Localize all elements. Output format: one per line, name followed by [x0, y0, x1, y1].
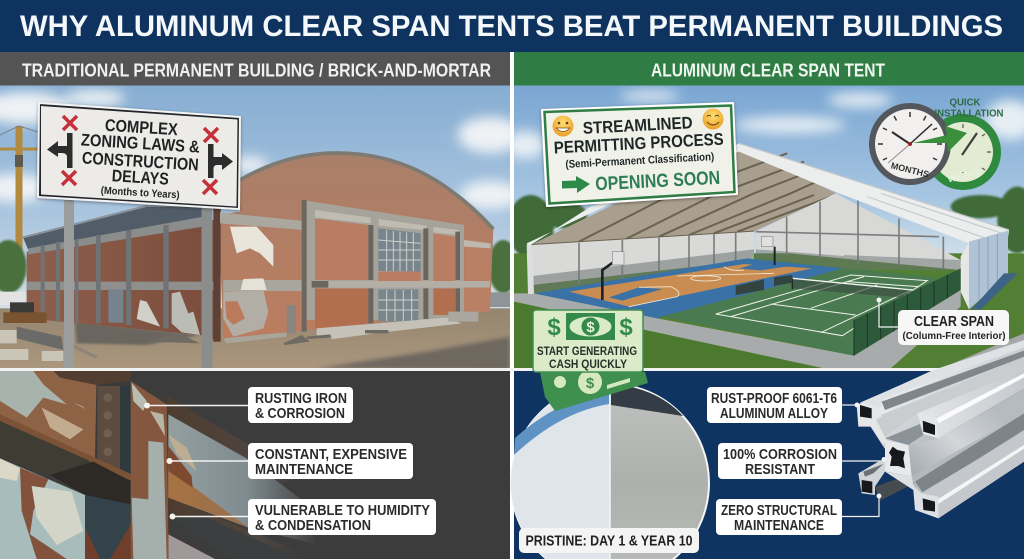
plaster damage	[230, 227, 273, 267]
title banner	[0, 0, 1024, 52]
pristine label	[519, 528, 699, 553]
callout: zero maintenance	[716, 494, 882, 535]
road sign: complex zoning laws	[38, 103, 240, 209]
callout: rust-proof: ALUMINUM ALLOY	[720, 406, 828, 422]
tennis court	[661, 268, 937, 356]
panel: brick building scene	[0, 85, 522, 370]
sign text: OPENING SOON	[595, 168, 721, 195]
sign text: STREAMLINED	[582, 113, 693, 138]
dollar bill: $	[586, 375, 595, 392]
cash card: START GENERATING	[537, 344, 637, 358]
cash card: CASH QUICKLY	[549, 357, 627, 371]
sign text: PERMITTING PROCESS	[553, 130, 724, 157]
red x marks	[62, 116, 218, 194]
callout: maintenance: MAINTENANCE	[255, 462, 353, 478]
fence	[854, 268, 961, 356]
trees and background	[0, 240, 518, 293]
underside and lower-left lobe	[875, 475, 914, 501]
cash card: $	[547, 314, 561, 341]
green arrow	[562, 176, 590, 193]
divider	[0, 368, 1024, 371]
sign text: (Months to Years)	[100, 185, 180, 201]
panel: tent scene	[505, 85, 1024, 370]
callout: rusting iron: RUSTING IRON	[255, 391, 347, 407]
callout: humidity	[170, 499, 436, 535]
basketball court	[534, 258, 844, 318]
ground	[0, 308, 510, 370]
callout: clear span	[876, 298, 1009, 345]
cash card: $	[586, 319, 595, 336]
trees	[507, 187, 1024, 258]
grass	[514, 253, 1024, 370]
callout: zero maintenance: ZERO STRUCTURAL	[721, 503, 837, 519]
debris	[17, 327, 63, 350]
right column heading: ALUMINUM CLEAR SPAN TENT	[651, 60, 885, 80]
callout: rust-proof	[707, 387, 860, 423]
left and right arrows	[47, 133, 233, 178]
callout: humidity: VULNERABLE TO HUMIDITY	[255, 503, 430, 519]
callout: corrosion resistant	[718, 443, 886, 479]
green arrow	[913, 126, 967, 152]
callout: rusting iron	[144, 387, 353, 423]
smiley right	[702, 108, 724, 130]
callout: clear span: CLEAR SPAN	[914, 313, 994, 330]
weeks clock: WEEKS	[947, 168, 981, 184]
sign text: CONSTRUCTION	[81, 148, 199, 175]
sign text: DELAYS	[111, 166, 169, 189]
tent interior ceiling	[527, 143, 836, 247]
panel: rusted steel detail	[0, 371, 510, 559]
clocks: months to weeks	[869, 98, 1004, 190]
callout: humidity: & CONDENSATION	[255, 518, 371, 534]
cash callout	[533, 310, 648, 411]
magnified comparison circle	[511, 384, 709, 559]
roof	[527, 143, 1009, 247]
sign post right	[202, 208, 212, 368]
callout: maintenance: CONSTANT, EXPENSIVE	[255, 447, 407, 463]
sign text: COMPLEX	[104, 116, 179, 139]
callout: clear span: (Column-Free Interior)	[902, 330, 1006, 342]
quick installation label: INSTALLATION	[934, 108, 1004, 120]
sign text	[553, 113, 724, 195]
facade frame	[302, 200, 464, 320]
concrete paths	[514, 290, 961, 368]
left column heading: TRADITIONAL PERMANENT BUILDING / BRICK-AND-MORTAR	[22, 60, 491, 80]
callout: zero maintenance: MAINTENANCE	[734, 518, 824, 534]
hoops and benches	[602, 247, 775, 300]
callout: corrosion resistant: 100% CORROSION	[723, 447, 837, 463]
quick installation label: QUICK	[950, 98, 981, 108]
main brick wall and arched roof	[218, 153, 493, 338]
dark wing	[23, 205, 203, 250]
cash card: $	[619, 314, 633, 341]
web and hub faces	[857, 405, 887, 445]
callout: maintenance	[166, 443, 413, 479]
sign text	[80, 116, 200, 201]
sign text: ZONING LAWS &	[80, 130, 200, 157]
sign text: (Semi-Permanent Classification)	[565, 151, 715, 171]
cash card	[533, 310, 643, 372]
sign post left	[64, 200, 74, 368]
smiley left	[552, 116, 574, 136]
pristine label: PRISTINE: DAY 1 & YEAR 10	[526, 534, 692, 550]
tent side wall	[969, 231, 1008, 309]
callout: rusting iron: & CORROSION	[255, 406, 345, 422]
profile holes	[860, 405, 872, 418]
back walls	[532, 232, 754, 285]
aluminum extrusion	[856, 340, 1024, 518]
months clock: MONTHS	[890, 160, 930, 180]
panel: aluminum detail	[511, 340, 1024, 559]
callout: rust-proof: RUST-PROOF 6061-T6	[711, 391, 837, 407]
quick installation label	[934, 98, 1004, 120]
right column heading	[514, 52, 1024, 86]
title: WHY ALUMINUM CLEAR SPAN TENTS BEAT PERMANENT BUILDINGS	[20, 10, 1003, 43]
left column heading	[0, 52, 510, 86]
rusted beams	[0, 371, 310, 559]
streamlined permitting sign	[542, 103, 737, 206]
callout: corrosion resistant: RESISTANT	[745, 462, 815, 478]
